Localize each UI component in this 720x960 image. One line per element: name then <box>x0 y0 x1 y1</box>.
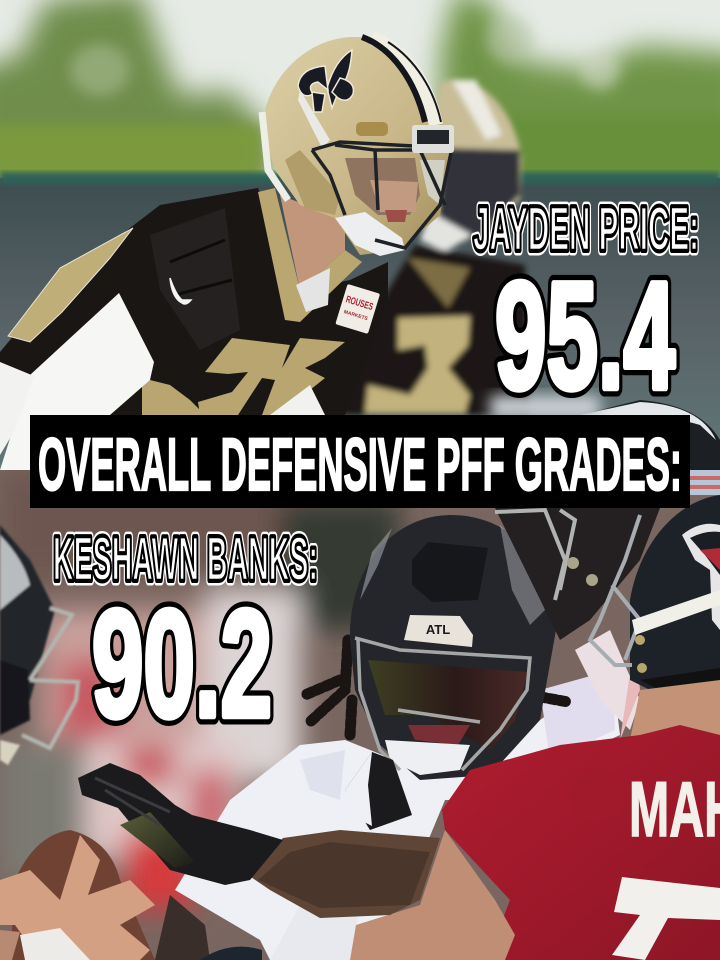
ATL badge <box>404 615 473 647</box>
tattooed forearm <box>248 830 440 918</box>
player body: black jersey <box>0 188 388 470</box>
right edge flag patch beside banner <box>690 470 720 495</box>
score: 90.2: 90.2 <box>92 579 272 749</box>
white clip <box>298 90 330 148</box>
white practice jersey <box>155 670 620 960</box>
chest number <box>198 338 345 415</box>
bottom photo: Keshawn Banks at practice <box>0 470 720 960</box>
label: Keshawn Banks <box>53 525 318 594</box>
sponsor patch <box>335 284 380 334</box>
text: KESHAWN BANKS: <box>53 525 318 594</box>
nike swoosh <box>170 278 191 304</box>
neck of right player <box>630 680 720 740</box>
black glove <box>78 763 283 885</box>
fleur-de-lis logo <box>298 50 353 112</box>
chin strap <box>335 212 405 256</box>
blurred background <box>0 470 720 960</box>
facemask <box>312 142 452 248</box>
text: KESHAWN BANKS: <box>53 525 318 594</box>
sponsor patch: ROUSES <box>344 294 375 313</box>
right player's helmet with falcon logo <box>590 495 720 695</box>
score: 90.2 <box>92 579 272 749</box>
text: KESHAWN BANKS: <box>53 525 318 594</box>
white undersleeve <box>0 293 154 470</box>
red jersey with name and number <box>442 725 720 960</box>
jersey number <box>612 877 720 960</box>
right player's arm <box>350 830 515 960</box>
sponsor patch: MARKETS <box>343 309 369 322</box>
black helmet <box>350 515 556 780</box>
dreadlocks <box>305 640 568 735</box>
top photo: Jayden Price on the field <box>0 0 720 488</box>
score: 90.2: 90.2 <box>92 579 272 749</box>
shoulder pad folds <box>150 208 240 350</box>
lower-right helmet peeking above the banner <box>588 400 720 470</box>
mouth and chin <box>408 725 470 745</box>
lower arm shadow <box>155 895 210 960</box>
blurred background: sky, trees and wall <box>0 0 720 488</box>
oakley badge <box>356 122 388 136</box>
gold collar <box>258 188 362 322</box>
visor <box>368 660 528 750</box>
black necklace towel <box>345 752 412 830</box>
background helmet and mask at top right <box>495 508 660 740</box>
banner: overall defensive PFF grades <box>30 415 690 508</box>
facemask <box>355 638 530 770</box>
lower helmet top at bottom edge <box>200 947 262 960</box>
helmet: Saints gold with fleur-de-lis <box>262 37 454 256</box>
white-black crown stripe <box>372 38 436 125</box>
background player, out of focus <box>345 76 532 415</box>
face <box>345 158 420 215</box>
hands holding a football <box>0 830 155 960</box>
neck and undershirt <box>280 195 345 290</box>
ATL badge: ATL <box>426 622 450 637</box>
sleeve gold number <box>8 228 133 342</box>
left blurred helmet <box>0 525 78 765</box>
